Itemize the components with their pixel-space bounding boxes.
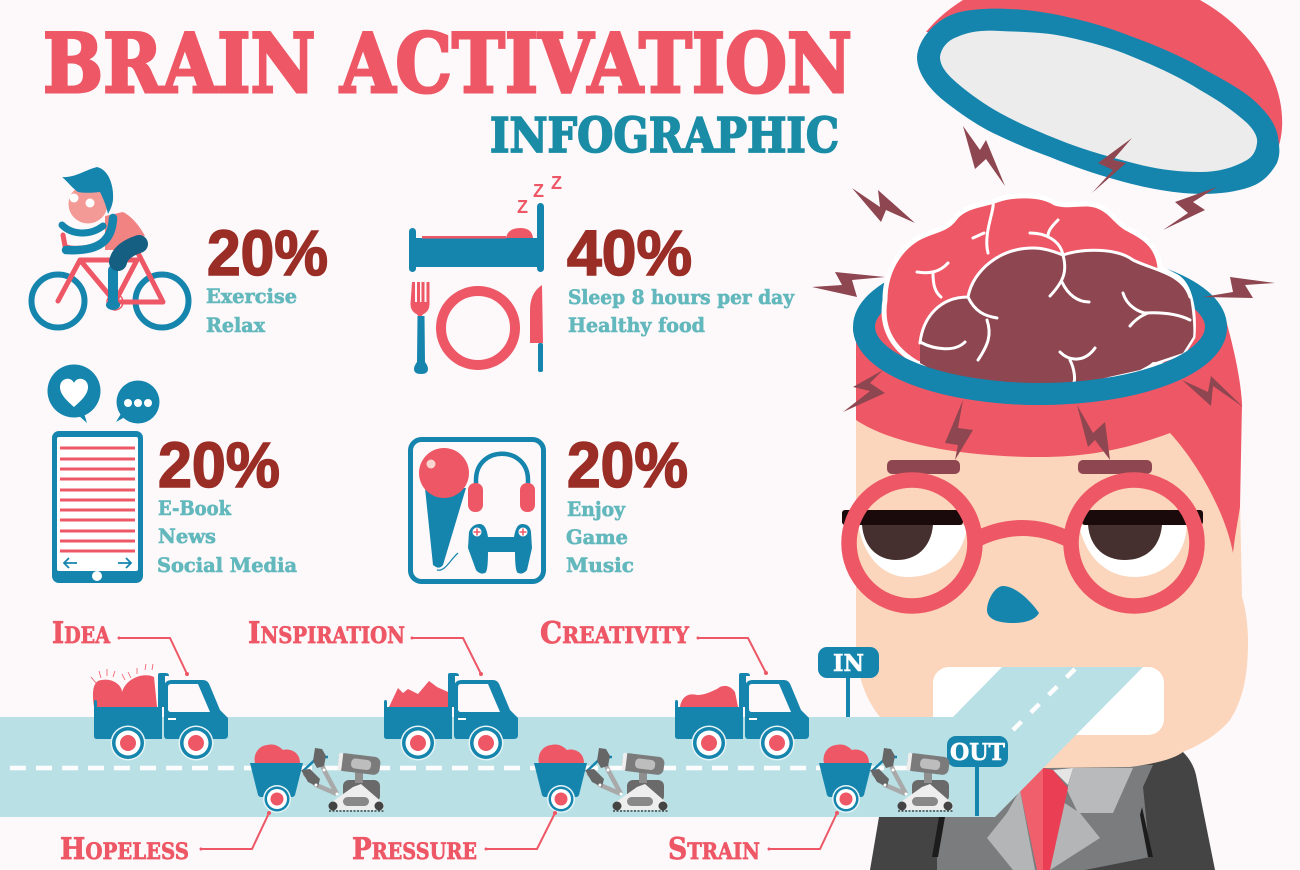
panel: exercise stat <box>32 167 328 337</box>
text: enjoy game music: Enjoy <box>567 497 626 521</box>
cart and robot: hopeless <box>250 744 384 813</box>
text: sleep and food: Healthy food <box>568 313 705 337</box>
eyes <box>842 510 1203 577</box>
glasses <box>849 480 1197 606</box>
OUT sign <box>947 736 1008 816</box>
text: enjoy game music <box>566 497 634 577</box>
truck: inspiration <box>384 673 518 760</box>
OUT sign: OUT <box>950 739 1005 766</box>
text: exercise relax <box>206 284 297 337</box>
title: BRAIN ACTIVATION <box>43 17 852 112</box>
label: creativity <box>540 616 768 675</box>
IN sign: IN <box>833 650 864 677</box>
icon: bed: Z <box>551 173 562 193</box>
lightning bolts <box>812 126 1275 460</box>
hair <box>856 320 1242 553</box>
text: ebook news social <box>157 496 297 577</box>
ring front <box>864 327 1216 394</box>
text: enjoy game music: Music <box>566 553 634 577</box>
cart and robot: strain <box>819 744 953 813</box>
label: idea <box>52 616 189 676</box>
label: pressure: PRESSURE <box>352 832 477 867</box>
label: strain: STRAIN <box>668 832 760 867</box>
cart and robot: pressure <box>534 744 668 813</box>
text: sleep and food: Sleep 8 hours per day <box>568 285 795 309</box>
text: ebook news social: News <box>158 524 216 548</box>
brain <box>884 196 1193 385</box>
text: ebook news social: E-Book <box>158 496 232 520</box>
panel: reading stat <box>48 364 297 583</box>
label: hopeless: HOPELESS <box>60 832 189 867</box>
label: strain <box>668 811 839 867</box>
road <box>0 667 1143 817</box>
panel: enjoy stat <box>410 429 688 582</box>
mouth <box>933 667 1164 735</box>
road centre line <box>10 667 1077 768</box>
icon: speech bubbles <box>48 364 160 424</box>
text: sleep and food <box>568 285 795 337</box>
subtitle: INFOGRAPHIC <box>490 108 839 164</box>
icon: fork plate knife <box>410 282 543 374</box>
panel: sleep and food stat <box>409 173 795 374</box>
suit <box>870 752 1215 870</box>
icon: cyclist <box>32 167 188 328</box>
label: inspiration <box>248 616 483 676</box>
icon: tablet <box>52 431 143 583</box>
IN sign <box>818 647 879 717</box>
face skin <box>856 400 1248 768</box>
character: head with open brain <box>842 196 1248 870</box>
icon: bed: Z <box>533 181 544 201</box>
label: hopeless <box>60 811 271 867</box>
head lid <box>917 0 1282 194</box>
nose <box>987 586 1039 623</box>
eyebrows <box>887 460 1152 474</box>
text: enjoy game music: Game <box>566 525 628 549</box>
stat: 40%: 40% <box>567 217 692 289</box>
label: pressure <box>352 811 557 867</box>
stat: 20% enjoy: 20% <box>567 429 688 501</box>
stat: 20% exercise: 20% <box>207 217 328 289</box>
label: idea: IDEA <box>52 616 111 651</box>
stat: 20% reading: 20% <box>158 429 280 501</box>
text: ebook news social: Social Media <box>157 553 297 577</box>
ring back <box>864 260 1216 394</box>
label: inspiration: INSPIRATION <box>248 616 405 651</box>
icon: bed: Z <box>517 197 528 217</box>
truck: idea <box>91 664 228 760</box>
icon: bed <box>409 173 562 272</box>
text: exercise relax: Relax <box>206 313 266 337</box>
label: creativity: CREATIVITY <box>540 616 689 651</box>
icon: entertainment box <box>410 440 544 582</box>
text: exercise relax: Exercise <box>206 284 297 308</box>
truck: creativity <box>675 673 809 760</box>
